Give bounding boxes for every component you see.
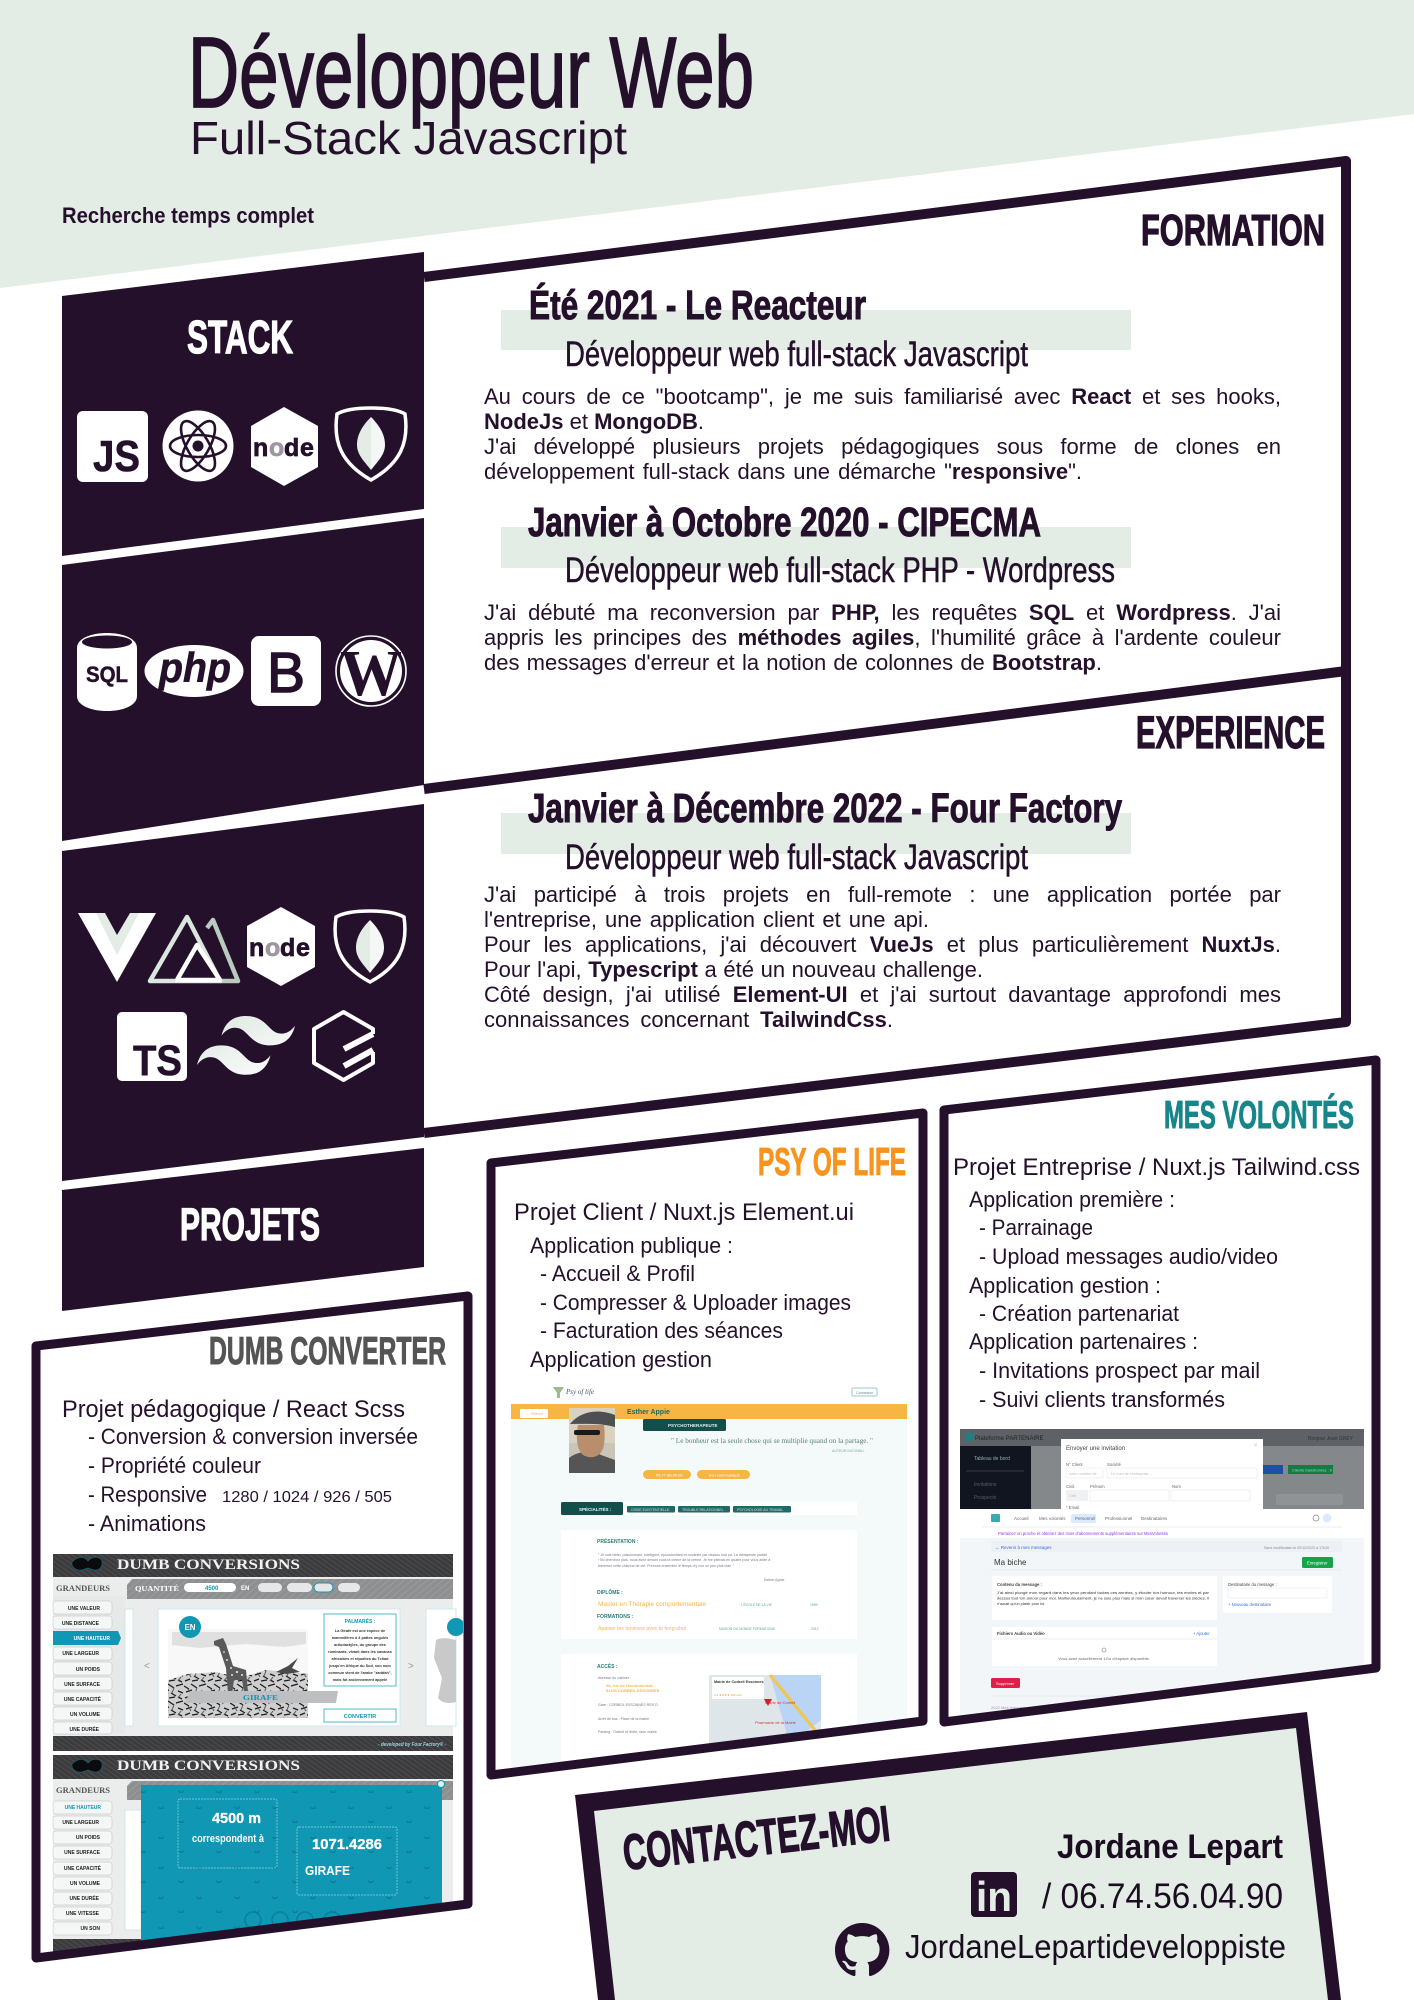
screenshot: mes volontes: Sans modification le 02/12/2022 à 17h30: [1264, 1546, 1329, 1550]
icon: typescript: TS: [133, 1037, 182, 1085]
screenshot: mes volontes: ← Revenir à mes messages: [995, 1545, 1052, 1550]
project description: - Upload messages audio/video: [979, 1244, 1278, 1269]
project description: - Propriété couleur: [88, 1453, 261, 1478]
heading: dumb converter: DUMB CONVERTER: [209, 1330, 446, 1373]
screenshot: psy of life: traverser cette chienne de vie. Prenons ensemble le temps d'y voir un peu plus clair. ": [598, 1564, 735, 1568]
project description: - Accueil & Profil: [540, 1261, 695, 1286]
formation entry 1 heading: Développeur web full-stack Javascript: [565, 335, 1028, 374]
panel: stack dark block 2: [62, 518, 424, 841]
screenshot: mes volontes: Envoyer une invitation: [1066, 1446, 1125, 1452]
experience entry heading: Janvier à Décembre 2022 - Four Factory: [528, 785, 1122, 831]
frame: [944, 1060, 1376, 1722]
screenshot: psy of life: ACCÈS :: [597, 1662, 618, 1670]
icon: bootstrap: [251, 636, 321, 706]
screenshot 1: UNE HAUTEUR: [74, 1636, 110, 1642]
icon: sql database: [77, 633, 137, 711]
contact phone: / 06.74.56.04.90: [1042, 1877, 1283, 1916]
contact name: Jordane Lepart: [1057, 1828, 1283, 1866]
screenshot 1: UNE CAPACITÉ: [64, 1695, 102, 1703]
project description: - Compresser & Uploader images: [540, 1290, 851, 1315]
screenshot 1: - developed by Four Factory® -: [378, 1741, 446, 1748]
icon: linkedin: in: [976, 1873, 1012, 1920]
screenshot 1: UNE SURFACE: [64, 1682, 101, 1688]
text block: experience entry: connaissances concernant TailwindCss.: [484, 1007, 893, 1032]
screenshot: mes volontes: dessus tout ton amour pour moi. Malheureusement, je ne suis plus mais si mon cœur devait traverser les siècles, il: [997, 1596, 1209, 1600]
portrait photo: [569, 1408, 615, 1473]
screenshot: psy of life: L'ÉCOLE DE LA VIE: [741, 1602, 773, 1607]
screenshot: psy of life: Apaiser les tensions avec le feng-shui: [598, 1626, 686, 1632]
panel: formation and experience frame: [424, 161, 1346, 1133]
heading: contactez-moi: CONTACTEZ-MOI: [620, 1795, 893, 1881]
screenshot 1: UNE LARGEUR: [62, 1651, 99, 1657]
text block: formation entry 2: [484, 600, 1281, 675]
screenshot: psy of life: Pharmacie de la Mairie: [755, 1720, 797, 1725]
screenshot: psy of life: SPÉCIALITÉS :: [579, 1505, 612, 1512]
project description: Application gestion :: [969, 1273, 1161, 1298]
screenshot: psy of life: 2012: [811, 1627, 819, 1631]
screenshot: mes volontes: Fichiers Audio ou Vidéo: [997, 1631, 1045, 1636]
project description: Projet Client / Nuxt.js Element.ui: [514, 1199, 854, 1226]
screenshot 2: UNE SURFACE: [64, 1850, 101, 1856]
screenshot: mes volontes: + Ajouter: [1193, 1631, 1210, 1636]
experience entry heading: Développeur web full-stack Javascript: [565, 838, 1028, 877]
screenshot: mes volontes: n'aurait qu'un plaisir pour toi.: [997, 1602, 1045, 1606]
screenshot 1: [53, 1554, 465, 1751]
screenshot 1: <: [144, 1661, 150, 1672]
text block: formation entry 1: [484, 384, 1281, 484]
screenshot 2: [53, 1755, 453, 1965]
screenshot 2: 1071.4286: [312, 1836, 382, 1853]
panel: projets dark block: [62, 1148, 424, 1311]
screenshot 1: mais fut anciennement appelé: [333, 1678, 387, 1682]
screenshot 2: 4500 m: [212, 1810, 261, 1827]
heading: stack: STACK: [187, 311, 293, 363]
panel: mes volontes project: [944, 1060, 1376, 1729]
text block: experience entry: l'entreprise, une application client et une api.: [484, 907, 929, 932]
icon: github: [835, 1923, 889, 1976]
icon: vue: [78, 913, 156, 982]
screenshot 2: GRANDEURS: [56, 1786, 111, 1795]
screenshot 1: UNE DURÉE: [70, 1725, 100, 1733]
screenshot: mes volontes: Mes volontés: [1039, 1516, 1066, 1521]
screenshot: psy of life: 28, rue de l'Incomrécient: [606, 1683, 653, 1688]
screenshot: mes volontes: Professionnel: [1105, 1516, 1132, 1521]
screenshot: psy of life: Adresse du cabinet :: [598, 1676, 631, 1680]
icon: typescript: [117, 1012, 187, 1085]
screenshot: psy of life: PSYCHOTHERAPEUTE: [668, 1423, 718, 1428]
screenshot: psy of life: ! No cherchez plus, nous avez devant vous la crème de la crème. Je me plierais en quatre pour vous aider à: [598, 1558, 770, 1562]
availability note: Recherche temps complet: [62, 203, 315, 228]
text block: formation entry 2: J'ai débuté ma reconversion par PHP, les requêtes SQL et Wordpress. J'ai: [484, 600, 1281, 625]
screenshot 1: UNE DISTANCE: [62, 1621, 100, 1627]
screenshot 1: QUANTITÉ: [135, 1585, 179, 1593]
screenshot: psy of life: TROUBLE RELATIONNEL: [682, 1508, 724, 1512]
formation entry 2 heading: Janvier à Octobre 2020 - CIPECMA: [528, 499, 1041, 545]
text block: formation entry 1: développement full-stack dans une démarche "responsive".: [484, 459, 1082, 484]
heading: formation: FORMATION: [1141, 206, 1325, 255]
screenshot 2: correspondent à: [192, 1833, 265, 1845]
screenshot 1: GIRAFE: [243, 1694, 278, 1702]
screenshot: mes volontes: Le nom de l'entreprise...: [1111, 1472, 1152, 1476]
project description: [953, 1154, 1360, 1412]
screenshot 1: jusqu'en Afrique du Sud, son nom: [328, 1664, 391, 1668]
project description: Projet pédagogique / React Scss: [62, 1396, 405, 1423]
title: [188, 17, 754, 164]
screenshot: psy of life: CRISE EXISTENTIELLE: [631, 1508, 670, 1512]
project description: 1280 / 1024 / 926 / 505: [222, 1489, 392, 1506]
screenshot: psy of life: Arrêt de bus : Place de la mairie: [598, 1717, 649, 1721]
text block: formation entry 1: Au cours de ce "bootcamp", je me suis familiarisé avec React et ses hooks,: [484, 384, 1281, 409]
screenshot: psy of life: 91100 CORBEIL ESSONNES: [606, 1688, 660, 1693]
screenshot 1: artiodactyles, du groupe des: [334, 1643, 386, 1647]
icon: php: [144, 644, 244, 697]
icon: node: node: [253, 434, 314, 462]
screenshot: psy of life: 1999: [810, 1603, 818, 1607]
screenshot: mes volontes: Bonjour Jean GREY: [1308, 1436, 1354, 1442]
project description: - Animations: [88, 1511, 206, 1536]
screenshot 2: UN VOLUME: [70, 1881, 101, 1887]
panel: stack dark block 3: [62, 804, 424, 1181]
icon: bootstrap: B: [267, 641, 305, 705]
panel: dumb converter project: [36, 1296, 468, 1965]
panel: stack dark block 1: [62, 252, 424, 556]
screenshot: mes volontes: Civil.: [1066, 1484, 1075, 1489]
screenshot: psy of life: Mairie de Corbeil: [765, 1700, 795, 1705]
screenshot: mes volontes: Invitations: [974, 1482, 997, 1488]
screenshot 1: UN VOLUME: [70, 1712, 101, 1718]
project description: - Invitations prospect par mail: [979, 1358, 1260, 1383]
screenshot 2: UNE LARGEUR: [62, 1820, 99, 1826]
project description: - Responsive: [88, 1482, 207, 1507]
icon: node: [247, 907, 315, 986]
icon: mongodb: [335, 911, 405, 982]
screenshot: psy of life: 05.77.88.99.00: [656, 1472, 683, 1478]
screenshot 1: GRANDEURS: [56, 1584, 111, 1593]
screenshot: mes volontes: Enregistrer: [1307, 1560, 1328, 1566]
frame: [491, 1113, 923, 1775]
text block: experience entry: [484, 882, 1281, 1032]
screenshot: psy of life: " Je suis beau, passionnant, intelligent, époustouflant et modeste par dessus tout ça. La thérapeute parfait: [598, 1553, 767, 1557]
formation entry 2 heading: [501, 499, 1131, 590]
screenshot 2: UN SON: [81, 1926, 100, 1932]
screenshot 2: UNE CAPACITÉ: [64, 1864, 102, 1872]
screenshots: dumb conversions: [53, 1554, 465, 1965]
screenshot: mes volontes: Civil: [1069, 1494, 1076, 1498]
text block: formation entry 2: appris les principes des méthodes agiles, l'humilité grâce à l'ardente couleur: [484, 625, 1281, 650]
screenshot 1: commun vient de l'arabe "zarâfah",: [328, 1671, 392, 1675]
screenshot: mes volontes: Accueil: [1014, 1516, 1029, 1521]
icon: react: [162, 410, 234, 482]
project description: [62, 1396, 418, 1536]
project description: - Facturation des séances: [540, 1318, 783, 1343]
screenshot 2: UN POIDS: [76, 1835, 101, 1841]
screenshot: mes volontes: Ma biche: [994, 1558, 1027, 1567]
icon: node: [251, 407, 318, 486]
screenshot: psy of life: " Le bonheur est la seule chose qui se multiplie quand on la partage. ": [671, 1437, 873, 1445]
icon: nuxt: [150, 917, 238, 981]
screenshot 1: EN: [241, 1586, 249, 1592]
screenshot: psy of life: Esther Appie: [627, 1409, 670, 1416]
screenshot: psy of life: 3,3 ★★★★ 104 avis: [714, 1693, 742, 1697]
screenshot: psy of life: Parking : Gratuit et limité, face mairie: [598, 1730, 657, 1734]
screenshot: mes volontes: Clients transformés : 0: [1292, 1468, 1333, 1472]
icon: node: node: [249, 934, 310, 962]
icon: element ui: [314, 1012, 373, 1080]
title: Développeur Web: [188, 17, 754, 129]
giraffe: [214, 1638, 248, 1694]
project description: Application publique :: [530, 1233, 733, 1258]
screenshot: mes volontes: votre numéro de: [1069, 1472, 1097, 1476]
formation entry 2 heading: Développeur web full-stack PHP - Wordpress: [565, 551, 1115, 590]
screenshot: mes volontes: Destinataire du message :: [1228, 1582, 1277, 1587]
screenshot: mes volontes: ×: [1254, 1443, 1258, 1449]
screenshot 1: mammifères à 4 pattes ongulés: [332, 1636, 388, 1640]
screenshot: psy of life: non communiqué: [709, 1472, 740, 1478]
screenshot: mes volontes: Prénom: [1090, 1484, 1105, 1489]
screenshot 1: CONVERTIR: [344, 1714, 376, 1720]
project description: - Parrainage: [979, 1215, 1093, 1240]
text block: formation entry 1: NodeJs et MongoDB.: [484, 409, 704, 434]
screenshot 1: UNE VALEUR: [68, 1606, 100, 1612]
project description: - Création partenariat: [979, 1301, 1179, 1326]
subtitle: Full-Stack Javascript: [190, 112, 627, 164]
screenshot 1: La Girafe est une espèce de: [335, 1629, 385, 1633]
project description: Application gestion: [530, 1347, 712, 1372]
screenshot: psy of life: PRÉSENTATION :: [597, 1537, 639, 1545]
screenshot: mes volontes: Plateforme PARTENAIRE: [975, 1436, 1043, 1442]
screenshot: psy of life: FORMATIONS :: [597, 1614, 634, 1620]
screenshot 2: DUMB CONVERSIONS: [117, 1758, 300, 1774]
panel: psy of life project: [491, 1113, 923, 1784]
screenshot 2: UNE DURÉE: [70, 1894, 100, 1902]
screenshot: mes volontes: [960, 1429, 1364, 1729]
screenshot: mes volontes: Destinataires: [1141, 1516, 1168, 1521]
text block: experience entry: J'ai participé à trois projets en full-remote : une application portée par: [484, 882, 1281, 907]
icon: javascript: JS: [93, 432, 140, 481]
screenshot 2: GIRAFE: [305, 1863, 350, 1878]
icon: tailwind: [197, 1016, 295, 1075]
text block: formation entry 2: des messages d'erreur et la notion de colonnes de Bootstrap.: [484, 650, 1102, 675]
icon: wordpress: W: [340, 637, 402, 710]
formation entry 1 heading: [501, 282, 1131, 374]
background band: [0, 0, 1414, 288]
screenshot 1: PALMARÈS :: [345, 1617, 376, 1625]
frame: [36, 1296, 468, 1958]
screenshot: mes volontes: N° Client: [1066, 1462, 1083, 1467]
contact github handle: JordaneLepartideveloppiste: [905, 1928, 1286, 1965]
text block: experience entry: Côté design, j'ai utilisé Element-UI et j'ai surtout davantage approfondi mes: [484, 982, 1281, 1007]
experience entry heading: [501, 785, 1131, 877]
screenshot 1: >: [408, 1661, 414, 1672]
screenshot 2: UNE HAUTEUR: [65, 1805, 101, 1811]
screenshot 1: ruminants, vivant dans les savanes: [328, 1650, 392, 1654]
panel: contact: [575, 1712, 1341, 2000]
screenshot: psy of life: Mairie de Corbeil Essonnes: [714, 1680, 764, 1684]
project description: Projet Entreprise / Nuxt.js Tailwind.css: [953, 1154, 1360, 1181]
screenshot: mes volontes: J'ai ainsi plongé mon regard dans tes yeux pendant toutes ces années, y étouler ton humour, tes envies et par: [997, 1591, 1210, 1595]
screenshot: mes volontes: Société: [1107, 1462, 1122, 1467]
project description: Application première :: [969, 1187, 1175, 1212]
screenshot 1: 4500: [205, 1586, 219, 1592]
screenshot: psy of life: Master en Thérapie comportementale: [598, 1602, 707, 1608]
icon: mongodb: [336, 408, 406, 480]
project description: - Conversion & conversion inversée: [88, 1424, 418, 1449]
heading: psy of life: PSY OF LIFE: [758, 1141, 906, 1184]
screenshot: mes volontes: * Email: [1066, 1505, 1079, 1510]
screenshot: mes volontes: 2022 Mes Volontés - tous droits réservés: [991, 1705, 1063, 1710]
icon: php: php: [158, 644, 231, 691]
screenshot: mes volontes: Contenu du message :: [997, 1582, 1042, 1587]
screenshot: psy of life: Connexion: [856, 1391, 873, 1395]
screenshot: psy of life: Esther Appie.: [764, 1578, 785, 1582]
screenshot: mes volontes: Supprimer: [996, 1681, 1015, 1686]
heading: projets: PROJETS: [180, 1199, 320, 1250]
project description: [514, 1199, 854, 1372]
text block: experience entry: Pour les applications, j'ai découvert VueJs et plus particulièrement NuxtJs.: [484, 932, 1281, 957]
screenshot 1: africaines et réparties du Tchad: [332, 1657, 389, 1661]
screenshot 1: EN: [184, 1623, 196, 1632]
icon: sql database: SQL: [86, 662, 128, 687]
text block: experience entry: Pour l'api, Typescript a été un nouveau challenge.: [484, 957, 983, 982]
screenshot: mes volontes: Parrainez un proche et obtenez des mois d'abonnements supplémentaires sur MesVolontés: [998, 1531, 1168, 1536]
screenshot: psy of life: [511, 1383, 907, 1784]
screenshot: psy of life: AUTEUR INCONNU.: [832, 1449, 865, 1453]
screenshot 1: UN POIDS: [76, 1667, 101, 1673]
screenshot: mes volontes: Prospects: [974, 1495, 997, 1501]
text block: formation entry 1: J'ai développé plusieurs projets pédagogiques sous forme de clones en: [484, 434, 1281, 459]
screenshot: mes volontes: Personnel: [1075, 1516, 1095, 1521]
formation entry 1 heading: Été 2021 - Le Reacteur: [529, 282, 866, 328]
screenshot: psy of life: DIPLÔME :: [597, 1588, 623, 1596]
screenshot: mes volontes: Vous avez actuellement 1Go d'espace disponible.: [1058, 1656, 1150, 1661]
screenshot: psy of life: PSYCHOLOGIE AU TRAVAIL: [737, 1508, 783, 1512]
screenshot: psy of life: MAISON DU MONDE FORMATIONS: [719, 1627, 776, 1631]
project description: - Suivi clients transformés: [979, 1387, 1225, 1412]
screenshot 1: DUMB CONVERSIONS: [117, 1557, 300, 1573]
icon: javascript: [77, 411, 148, 482]
screenshot: mes volontes: Tableau de bord: [974, 1456, 1010, 1462]
screenshot: mes volontes: + Nouveau destinataire: [1228, 1602, 1272, 1607]
screenshot: psy of life: Gare : CORBEIL ESSONNES RER D: [598, 1703, 658, 1707]
screenshot: mes volontes: Nom: [1172, 1484, 1181, 1489]
screenshot: psy of life: Psy of life: [565, 1388, 594, 1396]
screenshot 2: UNE VITESSE: [66, 1911, 100, 1917]
screenshot: psy of life: ← Retour: [526, 1411, 544, 1416]
project description: Application partenaires :: [969, 1329, 1198, 1354]
